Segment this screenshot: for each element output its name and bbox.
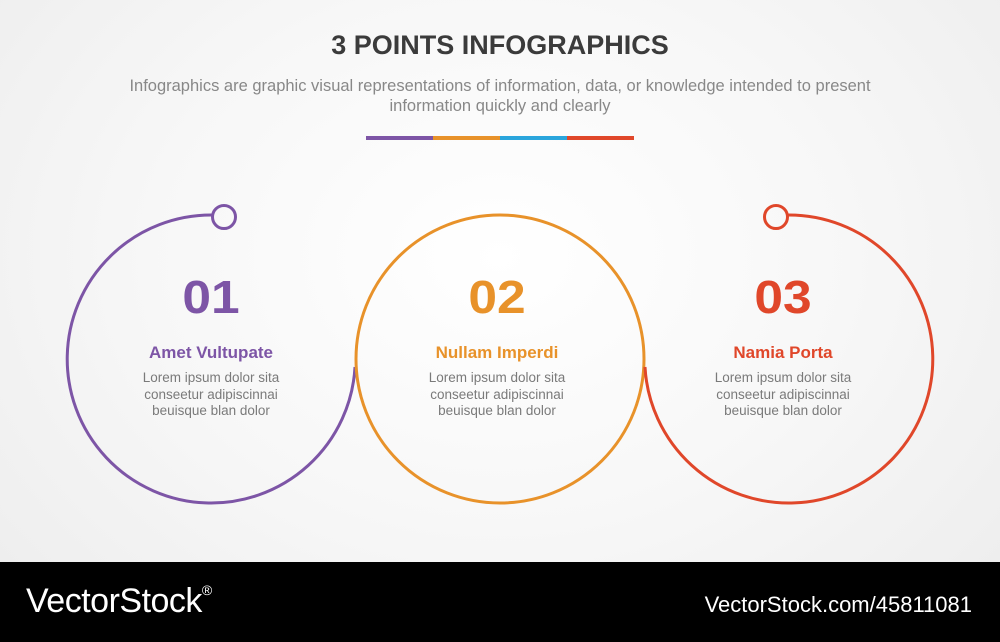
footer bar: VectorStock® — [26, 582, 212, 620]
text: beuisque blan dolor — [152, 403, 270, 418]
text: Lorem ipsum dolor sita — [715, 370, 851, 385]
text: 01 — [182, 271, 240, 323]
text: conseetur adipiscinnai — [716, 386, 850, 402]
title: 3 POINTS INFOGRAPHICS — [331, 30, 669, 60]
footer bar: VectorStock.com/45811081 — [705, 592, 972, 617]
subtitle: information quickly and clearly — [389, 97, 611, 115]
text: Namia Porta — [733, 343, 833, 362]
point 1 — [143, 271, 280, 418]
point 3 — [715, 271, 852, 418]
text: conseetur adipiscinnai — [430, 386, 564, 402]
footer bar — [0, 562, 1000, 642]
text: 03 — [754, 271, 812, 323]
text: Lorem ipsum dolor sita — [143, 370, 279, 385]
color divider — [366, 136, 634, 140]
subtitle — [129, 77, 871, 115]
circle 3 arc — [645, 206, 933, 503]
text: conseetur adipiscinnai — [144, 386, 278, 402]
text: beuisque blan dolor — [438, 403, 556, 418]
text: Lorem ipsum dolor sita — [429, 370, 565, 385]
circle 1 arc — [67, 206, 355, 503]
circle 2 — [356, 215, 644, 503]
point 2 — [429, 271, 566, 418]
text: Amet Vultupate — [149, 343, 273, 362]
subtitle: Infographics are graphic visual representations of information, data, or knowledge intended to present — [129, 77, 871, 95]
text: beuisque blan dolor — [724, 403, 842, 418]
text: Nullam Imperdi — [436, 343, 558, 362]
text: 02 — [468, 271, 526, 323]
